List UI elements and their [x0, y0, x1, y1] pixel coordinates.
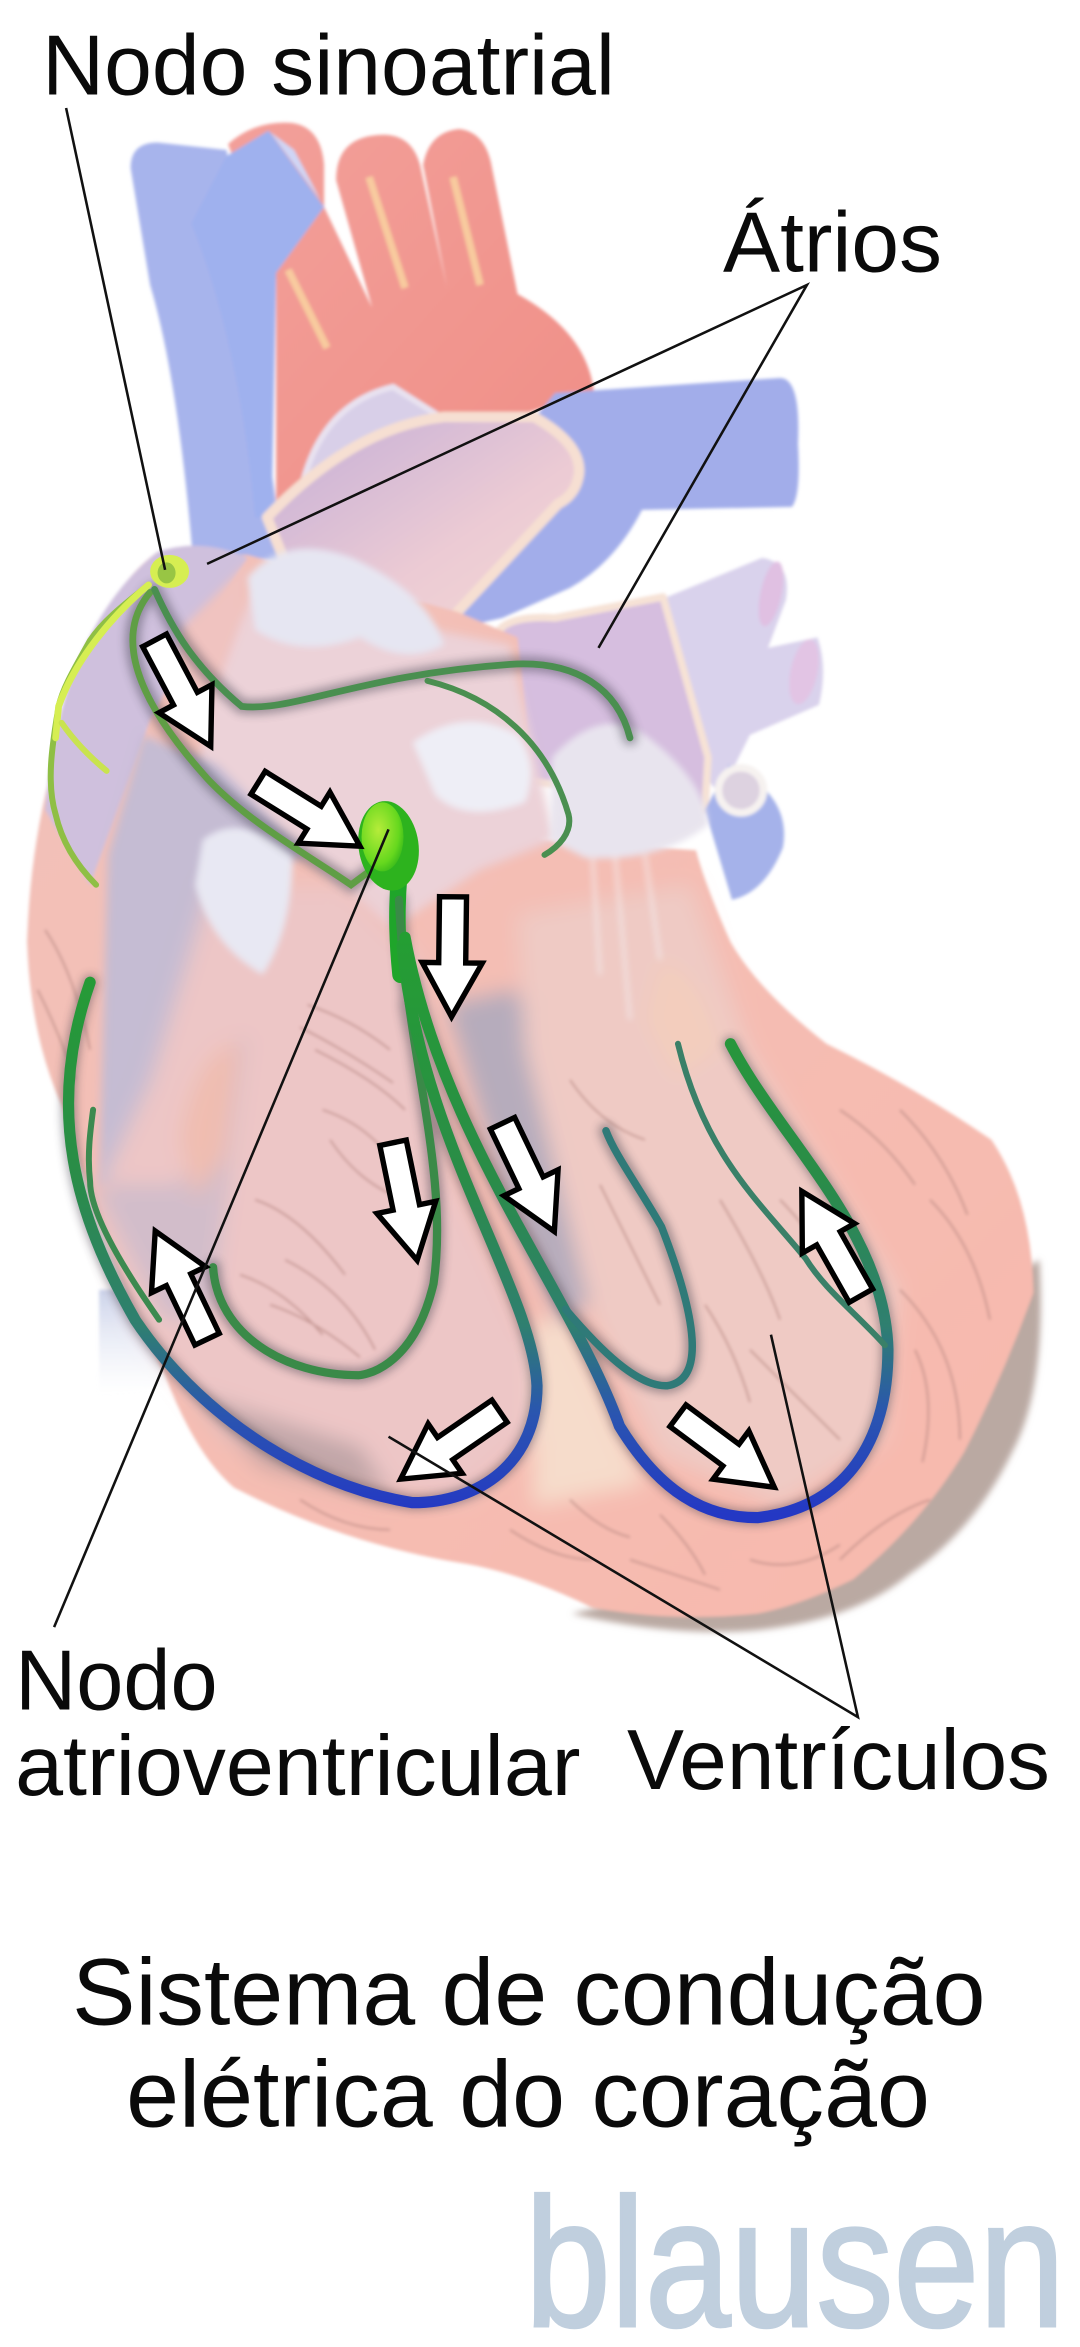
coronary sinus [705, 765, 784, 900]
right ventricle outer branch [678, 1044, 885, 1345]
His bundle [397, 877, 401, 975]
label: Nodo atrioventricular: atrioventricular [15, 1719, 580, 1814]
sinoatrial left branch [51, 585, 149, 885]
mitral and aortic valves [195, 549, 708, 1020]
pulmonary trunk opening [267, 387, 579, 630]
atrioventricular node [353, 797, 424, 895]
right atrium [45, 546, 555, 1185]
title: elétrica do coração [126, 2042, 930, 2148]
arrow: left wall upward [128, 1218, 234, 1352]
leader: sinoatrial node [66, 108, 165, 570]
internodal tract to left atrium [155, 589, 630, 738]
second atrial branch [428, 681, 569, 855]
arrow: right apex [660, 1392, 792, 1511]
pulmonary artery [435, 378, 799, 630]
conduction pathway shadow [68, 589, 888, 1518]
septal inner-left branch [213, 900, 437, 1375]
title [72, 1940, 985, 2148]
label: Nodo atrioventricular: Nodo [15, 1634, 218, 1729]
sinoatrial node [150, 555, 189, 588]
aorta and arteries [228, 123, 594, 525]
right ventricle inner branch [565, 1131, 692, 1386]
arrow: toward AV node [242, 757, 376, 872]
internodal tract to AV node [133, 592, 386, 885]
ventricle chambers [93, 885, 900, 1507]
arrow: left apex [384, 1386, 516, 1504]
title: Sistema de condução [72, 1940, 985, 2046]
left atrium and pulmonary veins [495, 558, 824, 810]
leader: atrioventricular node [54, 829, 389, 1627]
heart muscle veins [38, 930, 990, 1590]
atrial conduction pathways [51, 585, 630, 885]
arrow: right wall upward [776, 1177, 887, 1310]
superior vena cava [99, 130, 324, 1395]
heart illustration [27, 123, 1041, 1632]
direction arrows [128, 626, 887, 1511]
label: Átrios: Átrios [723, 195, 942, 290]
leader: atria [207, 285, 807, 648]
arrow: SA node downward [128, 626, 237, 760]
label: Ventrículos: Ventrículos [627, 1713, 1050, 1808]
arrow: right septum [475, 1110, 581, 1244]
right ventricle Purkinje branch [405, 937, 888, 1518]
label: Nodo atrioventricular [15, 1634, 580, 1814]
left ventricle Purkinje branch [68, 945, 537, 1503]
ventricular conduction branches [68, 877, 888, 1518]
leader: ventricles [389, 1335, 858, 1717]
heart muscle wall [27, 552, 1041, 1632]
label: Nodo sinoatrial: Nodo sinoatrial [42, 18, 615, 113]
arrow: from AV node [422, 896, 483, 1017]
arrow: left septum [364, 1137, 447, 1266]
leader lines [54, 108, 858, 1717]
left ventricle second branch [89, 1110, 159, 1320]
